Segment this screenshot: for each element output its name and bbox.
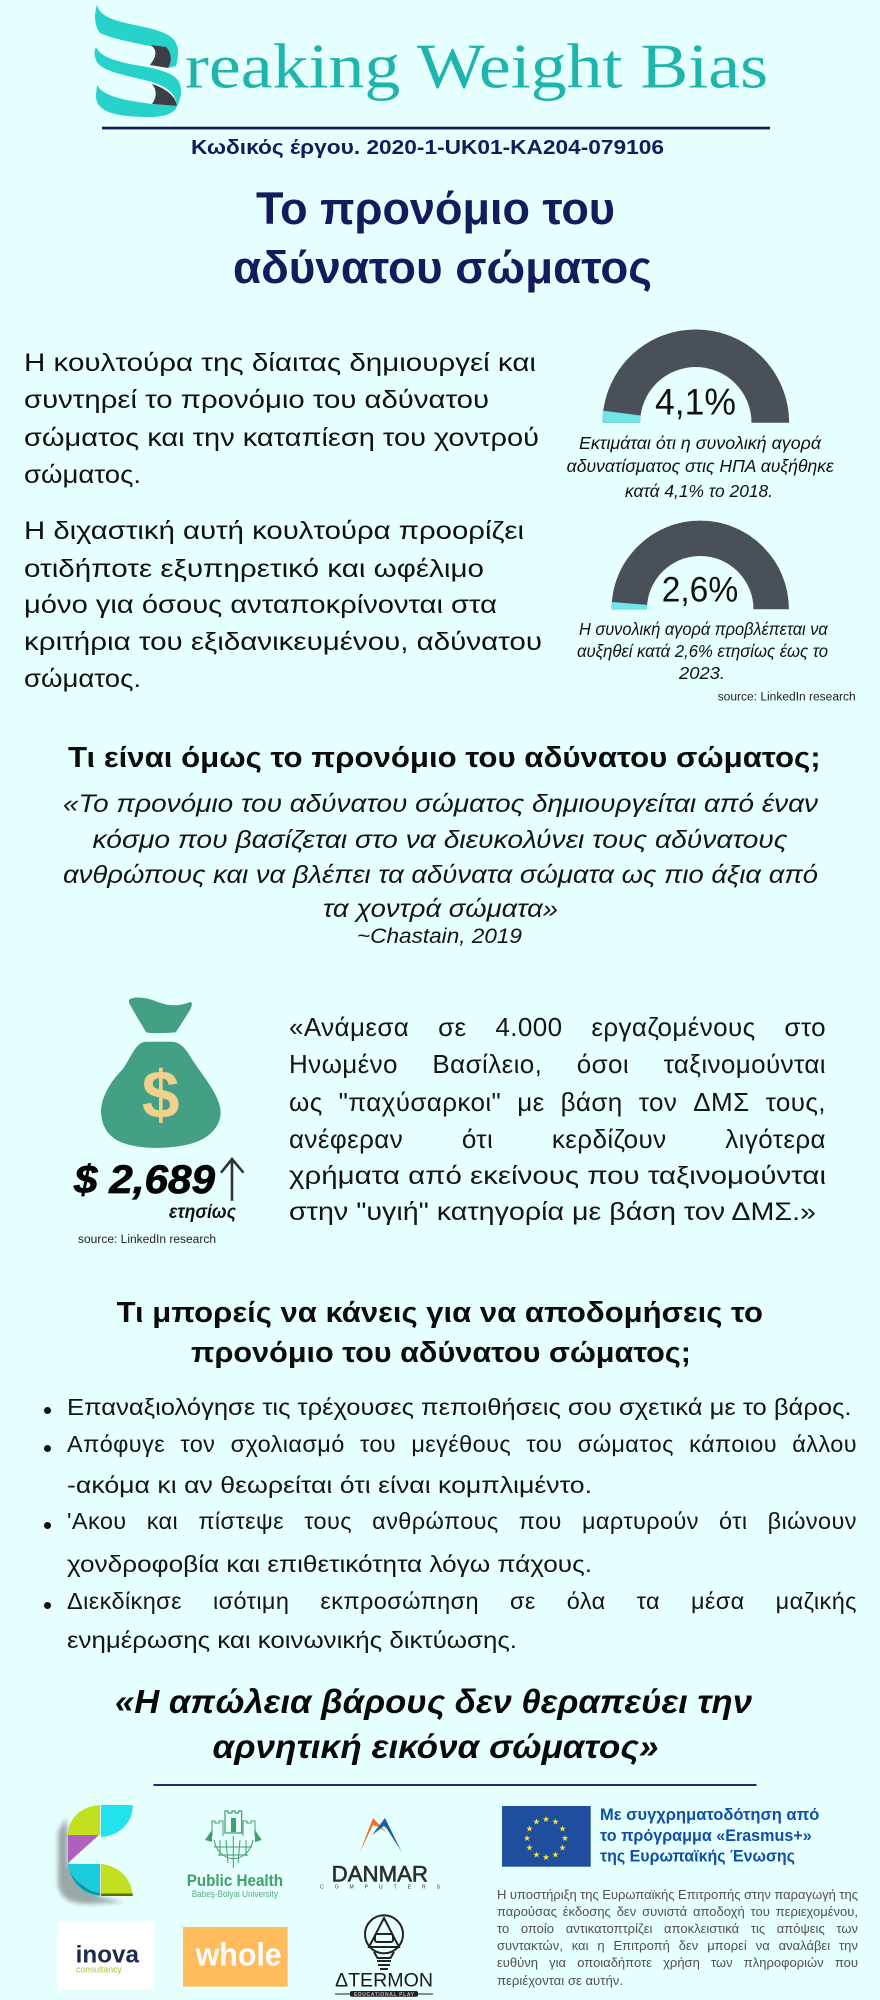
gauge caption: 4,1%	[567, 433, 834, 501]
bullet list: actions: του	[526, 1431, 562, 1457]
disclaimer text: ευθύνη	[497, 1955, 538, 1970]
logo: Public Health: Babeş-Bolyai University	[192, 1889, 278, 1900]
salary figure: $ 2,689	[73, 1158, 216, 1202]
project code: Κωδικός έργου. 2020-1-UK01-KA204-079106	[191, 137, 664, 159]
disclaimer text: τις	[751, 1921, 765, 1936]
logo: Public Health: Public Health	[187, 1871, 283, 1890]
closing statement: «Η απώλεια βάρους δεν θεραπεύει την	[115, 1683, 753, 1720]
gauge caption: 4,1%: κατά 4,1% το 2018.	[625, 481, 773, 501]
quote: UK workers pay gap: "παχύσαρκοι"	[339, 1087, 501, 1117]
gauge caption: 2,6%: Η συνολική αγορά προβλέπεται να	[579, 619, 829, 639]
quote: UK workers pay gap: «Ανάμεσα	[289, 1012, 409, 1042]
bullet list: actions: Επαναξιολόγησε τις τρέχουσες πεποιθήσεις σου σχετικά με το βάρος.	[67, 1394, 852, 1420]
disclaimer text: οποιαδήποτε	[577, 1955, 652, 1970]
intro text: κριτήρια του εξιδανικευμένου, αδύνατου	[24, 628, 542, 656]
quote: UK workers pay gap: ταξινομούνται	[664, 1049, 826, 1079]
bullet list: actions: σχολιασμό	[231, 1431, 345, 1457]
bullet list: actions: μαζικής	[776, 1588, 857, 1614]
gauge chart: 4,1%: 4,1%	[655, 382, 736, 423]
label: per year: ετησίως	[169, 1202, 237, 1223]
title: Breaking Weight Bias: reaking Weight Bias	[185, 30, 768, 102]
bullet list: actions: κάποιου	[689, 1431, 777, 1457]
gauge caption: 4,1%: Εκτιμάται ότι η συνολική αγορά	[579, 433, 822, 453]
quote: Chastain: τα χοντρά σώματα»	[323, 895, 558, 923]
intro text: Η κουλτούρα της δίαιτας δημιουργεί και	[24, 349, 536, 377]
source note: salary: source: LinkedIn research	[78, 1234, 216, 1246]
quote: UK workers pay gap: στην "υγιή" κατηγορία με βάση τον ΔΜΣ.»	[289, 1198, 816, 1226]
heading: what can you do: προνόμιο του αδύνατου σώματος;	[191, 1337, 691, 1369]
bullet list: actions: σώματος	[578, 1431, 674, 1457]
quote: UK workers pay gap: κερδίζουν	[552, 1124, 667, 1154]
heading: what can you do	[117, 1297, 763, 1369]
logo: Danmar Computers: DANMAR	[332, 1862, 428, 1887]
quote: UK workers pay gap: ότι	[462, 1124, 493, 1154]
disclaimer text: που	[835, 1955, 858, 1970]
quote: UK workers pay gap: ως	[289, 1087, 323, 1117]
quote: UK workers pay gap: λιγότερα	[725, 1124, 826, 1154]
intro text	[24, 349, 542, 693]
bullet list: actions: του	[360, 1431, 396, 1457]
gauge caption: 2,6%: αυξηθεί κατά 2,6% ετησίως έως το	[577, 641, 828, 661]
quote: UK workers pay gap: 4.000	[495, 1012, 562, 1042]
quote: UK workers pay gap: εργαζομένους	[591, 1012, 756, 1042]
main heading	[233, 183, 652, 293]
bullet list: actions: τα	[637, 1588, 660, 1614]
quote: Chastain: κόσμο που βασίζεται στο να διευκολύνει τους αδύνατους	[92, 826, 788, 854]
disclaimer text: έκδοσης	[563, 1904, 611, 1919]
quote: UK workers pay gap: στο	[784, 1012, 826, 1042]
logo: inova consultancy: consultancy	[76, 1965, 122, 1975]
disclaimer text: στην	[744, 1887, 771, 1902]
gauge caption: 2,6%	[577, 619, 829, 683]
logo: Danmar Computers: COMPUTERS	[320, 1885, 441, 1891]
quote: UK workers pay gap: τους,	[766, 1087, 826, 1117]
Erasmus+ funding statement: της Ευρωπαϊκής Ένωσης	[600, 1847, 795, 1866]
bullet list: actions: βιώνουν	[768, 1508, 857, 1534]
arrow: up	[221, 1159, 244, 1201]
disclaimer text: συνιστά	[642, 1904, 687, 1919]
disclaimer text: για	[549, 1955, 566, 1970]
logo: inova consultancy	[58, 1922, 153, 1989]
disclaimer text: συντακτών,	[497, 1938, 563, 1953]
bullet list: actions: σε	[510, 1588, 536, 1614]
source note: gauges: source: LinkedIn research	[718, 692, 856, 704]
disclaimer text: αποδοχή	[693, 1904, 745, 1919]
gauge caption: 2,6%: 2023.	[678, 663, 725, 683]
disclaimer text: χρήση	[663, 1955, 700, 1970]
logo: C partner	[58, 1805, 133, 1904]
quote: UK workers pay gap: με	[517, 1087, 545, 1117]
quote: Chastain	[63, 790, 819, 948]
disclaimer text: μπορεί	[707, 1938, 747, 1953]
main heading: αδύνατου σώματος	[233, 242, 652, 293]
disclaimer text: της	[839, 1887, 858, 1902]
disclaimer text: δεν	[679, 1938, 698, 1953]
disclaimer text: πληροφοριών	[744, 1955, 824, 1970]
quote: UK workers pay gap: όσοι	[577, 1049, 629, 1079]
bullet list: actions: τον	[180, 1431, 215, 1457]
disclaimer text: την	[839, 1938, 858, 1953]
heading: what is thin privilege: Τι είναι όμως το προνόμιο του αδύνατου σώματος;	[68, 742, 821, 774]
disclaimer text: δεν	[617, 1904, 636, 1919]
disclaimer text: του	[751, 1904, 770, 1919]
bullet list: actions: Διεκδίκησε	[67, 1588, 182, 1614]
disclaimer text: το	[497, 1921, 509, 1936]
icon: money bag: $	[142, 1057, 180, 1133]
bullet list: actions: και	[147, 1508, 178, 1534]
bullet list: actions: εκπροσώπηση	[320, 1588, 479, 1614]
logo: Breaking Weight Bias ribbon B	[94, 5, 181, 117]
intro text: σώματος.	[24, 461, 141, 489]
disclaimer text: της	[580, 1887, 599, 1902]
disclaimer text: περιεχομένου,	[776, 1904, 858, 1919]
bullet list: actions: πίστεψε	[198, 1508, 284, 1534]
disclaimer text: αποκλειστικά	[664, 1921, 739, 1936]
bullet list: actions: μεγέθους	[411, 1431, 511, 1457]
disclaimer text: Η	[497, 1887, 506, 1902]
disclaimer text: παρούσας	[497, 1904, 557, 1919]
quote: UK workers pay gap: τον	[639, 1087, 677, 1117]
bullet list: actions: που	[519, 1508, 562, 1534]
gauge caption: 4,1%: αδυνατίσματος στις ΗΠΑ αυξήθηκε	[567, 456, 834, 476]
bullet list: actions: ανθρώπους	[372, 1508, 499, 1534]
disclaimer text: η	[597, 1938, 605, 1953]
logo: Atermon: EDUCATIONAL PLAY	[354, 1992, 415, 1998]
Erasmus+ funding statement: Με συγχρηματοδότηση από	[600, 1805, 819, 1824]
bullet list: actions: μέσα	[691, 1588, 745, 1614]
quote: UK workers pay gap: βάση	[561, 1087, 623, 1117]
disclaimer text: των	[711, 1955, 733, 1970]
disclaimer text: παραγωγή	[774, 1887, 836, 1902]
bullet list: actions: ότι	[719, 1508, 747, 1534]
disclaimer text: περιέχονται σε αυτήν.	[497, 1974, 623, 1988]
intro text: συντηρεί το προνόμιο του αδύνατου	[24, 386, 489, 414]
gauge chart: 4,1%	[602, 329, 789, 423]
intro text: οτιδήποτε εξυπηρετικό και ωφέλιμο	[24, 555, 484, 583]
closing statement: αρνητική εικόνα σώματος»	[212, 1728, 658, 1765]
gauge chart: 2,6%: 2,6%	[662, 571, 738, 610]
icon: EU flag	[502, 1806, 591, 1867]
disclaimer text: των	[836, 1921, 858, 1936]
disclaimer text: αναλάβει	[779, 1938, 830, 1953]
closing statement	[115, 1683, 753, 1765]
quote: UK workers pay gap: ανέφεραν	[289, 1124, 403, 1154]
disclaimer text: Επιτροπή	[614, 1938, 670, 1953]
icon: money bag	[101, 997, 221, 1148]
disclaimer text: υποστήριξη	[510, 1887, 577, 1902]
quote: UK workers pay gap: Βασίλειο,	[432, 1049, 542, 1079]
bullet list: actions: όλα	[567, 1588, 606, 1614]
intro text: σώματος και την καταπίεση του χοντρού	[24, 424, 539, 452]
logo: Danmar Computers	[320, 1818, 441, 1891]
quote: Chastain: ~Chastain, 2019	[357, 925, 522, 948]
logo: Atermon: ΔTERMON	[335, 1970, 433, 1992]
bullet list: actions: άλλου	[792, 1431, 857, 1457]
intro text: μόνο για όσους ανταποκρίνονται στα	[24, 591, 497, 619]
bullet list: actions: -ακόμα κι αν θεωρείται ότι είναι κομπλιμέντο.	[67, 1472, 592, 1498]
logo: inova consultancy: inova	[76, 1942, 140, 1969]
logo: Public Health	[187, 1811, 283, 1900]
bullet list: actions	[44, 1394, 857, 1653]
disclaimer text: Ευρωπαϊκής	[602, 1887, 675, 1902]
bullet list: actions: ισότιμη	[213, 1588, 289, 1614]
bullet list: actions: ενημέρωσης και κοινωνικής δικτύωσης.	[67, 1627, 517, 1653]
intro text: Η διχαστική αυτή κουλτούρα προορίζει	[24, 517, 524, 545]
quote: UK workers pay gap: χρήματα από εκείνους που ταξινομούνται	[289, 1162, 826, 1190]
quote: UK workers pay gap: Ηνωμένο	[289, 1049, 398, 1079]
disclaimer text: και	[572, 1938, 588, 1953]
Erasmus+ funding statement	[600, 1805, 819, 1866]
bullet list: actions: 'Ακου	[67, 1508, 127, 1534]
disclaimer text: αντικατοπτρίζει	[566, 1921, 652, 1936]
disclaimer text: οποίο	[521, 1921, 554, 1936]
bullet list: actions: μαρτυρούν	[582, 1508, 699, 1534]
quote: Chastain: ανθρώπους και να βλέπει τα αδύνατα σώματα ως πιο άξια από	[63, 861, 818, 889]
disclaimer text: Επιτροπής	[678, 1887, 741, 1902]
quote: UK workers pay gap: ΔΜΣ	[693, 1087, 750, 1117]
disclaimer text: να	[756, 1938, 770, 1953]
intro text: σώματος.	[24, 665, 141, 693]
bullet list: actions: τους	[304, 1508, 352, 1534]
quote: Chastain: «Το προνόμιο του αδύνατου σώματος δημιουργείται από έναν	[63, 790, 819, 818]
Erasmus+ funding statement: το πρόγραμμα «Erasmus+»	[600, 1826, 812, 1845]
bullet list: actions: χονδροφοβία και επιθετικότητα λόγω πάχους.	[67, 1551, 592, 1577]
main heading: Το προνόμιο του	[256, 183, 615, 234]
disclaimer text	[497, 1887, 858, 1988]
gauge chart: 2,6%	[612, 521, 789, 610]
quote: UK workers pay gap: σε	[438, 1012, 467, 1042]
logo: whole: whole	[195, 1937, 282, 1973]
logo: Atermon	[335, 1915, 433, 1998]
bullet list: actions: Απόφυγε	[67, 1431, 165, 1457]
quote: UK workers pay gap	[289, 1012, 826, 1226]
disclaimer text: απόψεις	[777, 1921, 825, 1936]
heading: what can you do: Τι μπορείς να κάνεις για να αποδομήσεις το	[117, 1297, 763, 1329]
logo: whole	[183, 1927, 288, 1987]
